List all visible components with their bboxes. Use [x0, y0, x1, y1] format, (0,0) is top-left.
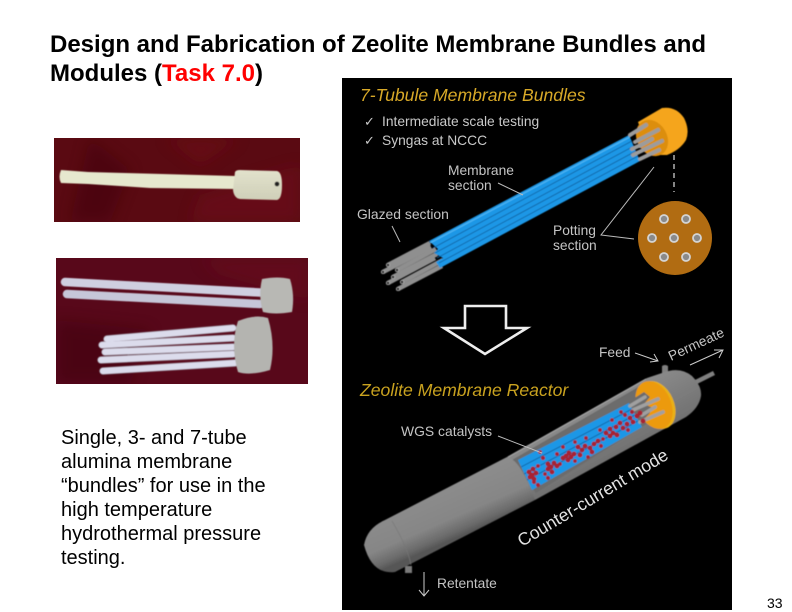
gray tube ends at cap: [630, 125, 662, 159]
diagram: 7-tubule bundle: [381, 108, 688, 291]
gray tubes in reactor: [630, 397, 663, 422]
label: glazed section: [357, 206, 449, 242]
label: potting section: section: [553, 238, 597, 253]
label: retentate: [419, 572, 497, 596]
label: potting section: [553, 167, 654, 253]
arrow: large outlined down arrow: [444, 306, 527, 354]
label: membrane section: Membrane: [448, 163, 514, 178]
page number: 33: [767, 595, 783, 611]
title: Design and Fabrication of Zeolite Membrane Bundles and: [50, 31, 706, 58]
label: permeate: Permeate: [666, 325, 727, 364]
panel: black schematic background: [342, 78, 732, 610]
heading: 7-tubule membrane bundles: 7-Tubule Membrane Bundles: [360, 85, 586, 105]
diagram: reactor: [364, 365, 714, 573]
label: feed: Feed: [599, 345, 630, 360]
label: retentate: Retentate: [437, 576, 497, 591]
body text: Single, 3- and 7-tube: [61, 427, 247, 449]
label: potting section: Potting: [553, 223, 596, 238]
title: Modules (Task 7.0): [50, 60, 263, 87]
photo: 3-tube and 7-tube bundles on red cloth: [56, 258, 308, 384]
blue membrane in reactor: [518, 403, 642, 490]
body text: hydrothermal pressure: [61, 523, 261, 545]
dashed connector: [673, 155, 675, 192]
bullet list: Syngas at NCCC: [382, 133, 487, 148]
blue membrane tubes: [429, 135, 640, 268]
bullet list: ✓: [364, 133, 375, 148]
orange ring: [628, 375, 683, 435]
label: feed: [599, 345, 658, 362]
reactor nozzles: [405, 365, 714, 573]
label: WGS catalysts: WGS catalysts: [401, 423, 492, 439]
body text: alumina membrane: [61, 451, 232, 473]
label: membrane section: section: [448, 178, 492, 193]
body text: [61, 427, 266, 569]
heading: zeolite membrane reactor: Zeolite Membrane Reactor: [359, 380, 569, 400]
body text: “bundles” for use in the: [61, 475, 266, 497]
dark tube tips: [381, 263, 404, 291]
reactor cut-open body and right cap: [507, 370, 701, 500]
bullet list: [364, 114, 539, 148]
label: counter-current mode: Counter-current mode: [514, 445, 672, 550]
icon: cross-section of potting: [638, 201, 712, 275]
bullet list: Intermediate scale testing: [382, 114, 539, 129]
orange potting cap: [630, 108, 688, 162]
gray glazed ends: [383, 243, 443, 289]
title: [50, 31, 706, 87]
body text: high temperature: [61, 499, 212, 521]
reactor gray shell: [364, 457, 535, 572]
body text: testing.: [61, 547, 125, 569]
label: glazed section: Glazed section: [357, 206, 449, 222]
label: WGS catalysts: [401, 423, 542, 453]
label: membrane section: [448, 163, 523, 195]
bullet list: ✓: [364, 114, 375, 129]
photo: single tube on red cloth: [54, 138, 300, 222]
reactor interior: [512, 386, 672, 493]
WGS catalyst pellets: [526, 410, 646, 487]
